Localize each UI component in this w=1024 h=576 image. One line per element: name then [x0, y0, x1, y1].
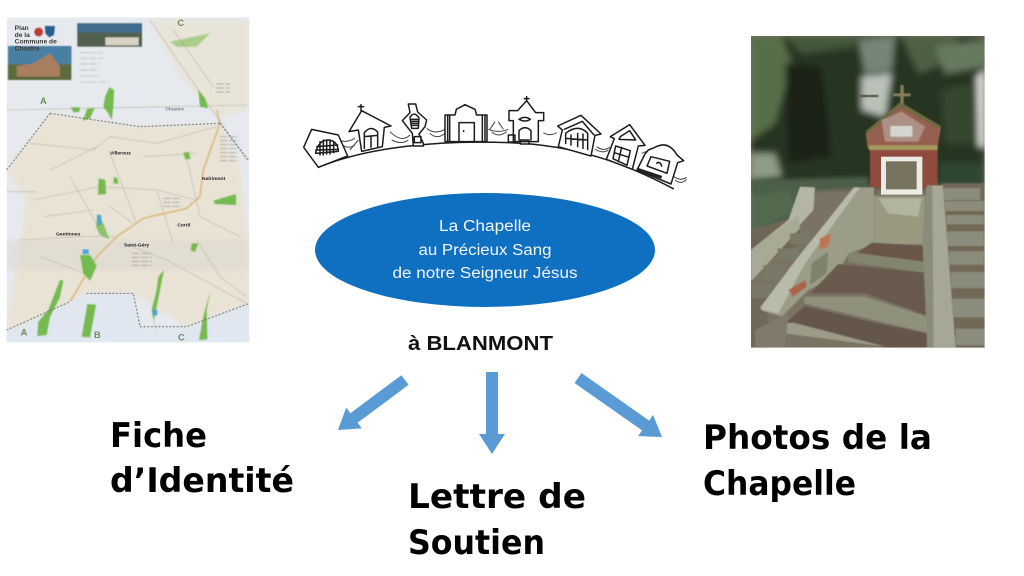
- map of the commune of Chastre: de la: [15, 32, 30, 39]
- map of the commune of Chastre: [7, 17, 249, 343]
- ivy: [751, 175, 870, 230]
- chapel brick body: [860, 85, 941, 244]
- map of the commune of Chastre: A: [21, 327, 28, 337]
- map of the commune of Chastre: C: [178, 333, 185, 343]
- stairs left: [751, 187, 815, 348]
- map of the commune of Chastre: Villeroux: [110, 151, 131, 157]
- blue oval title: [315, 193, 655, 307]
- map of the commune of Chastre: Chastre: [165, 107, 184, 113]
- map of the commune of Chastre: Gentinnes: [56, 231, 81, 237]
- trees and sky: [751, 36, 985, 186]
- label: Fiche d'Identité: d’Identité: [110, 461, 294, 501]
- stairs right: [942, 183, 985, 348]
- map of the commune of Chastre: Commune de: [15, 38, 57, 45]
- map of the commune of Chastre: Nalrimont: [202, 176, 226, 182]
- chapel photo: [751, 36, 985, 348]
- map of the commune of Chastre: Saint-Géry: [124, 243, 149, 249]
- label: Photos de la Chapelle: Chapelle: [703, 464, 856, 504]
- label: Lettre de Soutien: Soutien: [408, 523, 545, 563]
- map of the commune of Chastre: B: [94, 330, 101, 340]
- small map annotations: [80, 53, 239, 265]
- map of the commune of Chastre: Chastre: [15, 46, 40, 53]
- location label: à BLANMONT: [408, 333, 553, 355]
- blue oval title: La Chapelle: [439, 218, 531, 235]
- line drawing: row of chapels on an arc: [304, 97, 687, 189]
- arrow: left, to Fiche d'Identité: [338, 375, 409, 430]
- map of the commune of Chastre: A: [40, 96, 47, 106]
- label: Fiche d'Identité: Fiche: [110, 416, 207, 456]
- arrow: down, to Lettre de Soutien: [479, 372, 505, 454]
- blue oval title: au Précieux Sang: [418, 242, 552, 259]
- map of the commune of Chastre: C: [177, 18, 184, 28]
- garlands between the chapels: [338, 122, 687, 182]
- label: Photos de la Chapelle: Photos de la: [703, 418, 932, 458]
- label: Lettre de Soutien: Lettre de: [408, 477, 586, 517]
- map of the commune of Chastre: Plan: [15, 25, 29, 32]
- map of the commune of Chastre: Cortil: [177, 223, 191, 229]
- blue oval title: de notre Seigneur Jésus: [392, 265, 578, 282]
- arrow: right, to Photos de la Chapelle: [574, 373, 662, 437]
- stair walls and landing: [755, 185, 956, 348]
